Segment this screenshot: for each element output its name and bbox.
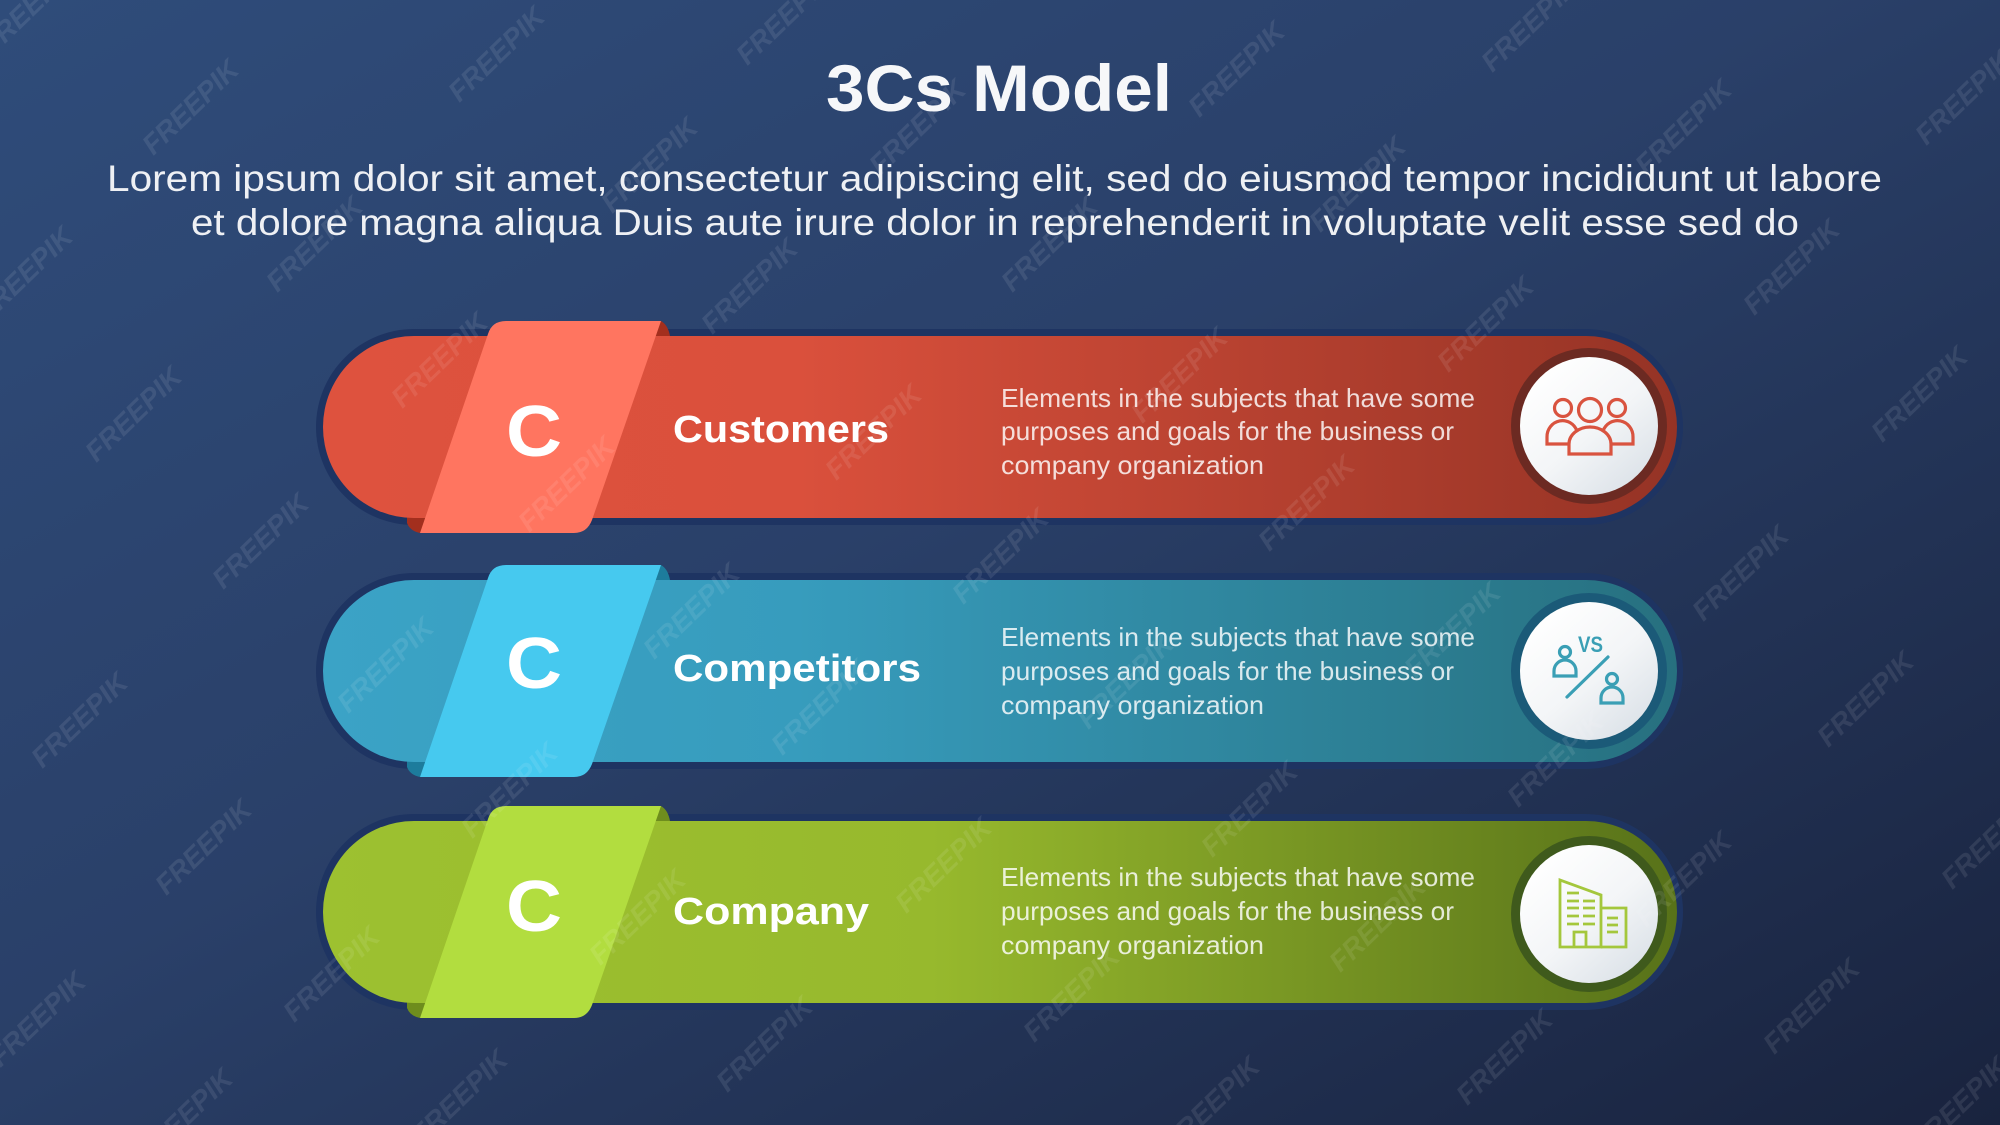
icon disc: [1511, 348, 1667, 504]
watermarks: FREEPIK: [1017, 940, 1127, 1047]
description: [1001, 383, 1475, 480]
watermarks: FREEPIK: [25, 666, 135, 773]
watermarks: FREEPIK: [1303, 130, 1413, 237]
icon disc: [1511, 593, 1667, 749]
ribbon: [420, 321, 661, 533]
watermarks: FREEPIK: [1501, 705, 1611, 812]
watermarks: FREEPIK: [79, 360, 189, 467]
description: purposes and goals for the business or: [1001, 896, 1454, 926]
icon: office building: [1560, 880, 1626, 947]
description: company organization: [1001, 690, 1264, 720]
bar outline: [316, 814, 1683, 1010]
icon: group of people: [1547, 398, 1633, 454]
bar outline: [316, 573, 1683, 769]
bar: [323, 821, 1677, 1003]
watermarks: FREEPIK: [1252, 449, 1362, 556]
letter C: C: [506, 624, 562, 704]
watermarks: FREEPIK: [1195, 755, 1305, 862]
description: [1001, 862, 1475, 960]
watermarks: FREEPIK: [995, 190, 1105, 297]
watermarks: FREEPIK: [512, 430, 622, 537]
ribbon: [420, 565, 661, 777]
bar: [323, 336, 1677, 518]
watermarks: FREEPIK: [1686, 519, 1796, 626]
watermarks: FREEPIK: [1450, 1003, 1560, 1110]
heading: Customers: [673, 409, 889, 451]
panel: customers: [316, 321, 1683, 533]
ribbon fold shadows: [407, 565, 670, 777]
ribbon: [420, 806, 661, 1018]
watermarks: FREEPIK: [206, 487, 316, 594]
bar outline: [316, 329, 1683, 525]
watermarks: FREEPIK: [1629, 825, 1739, 932]
watermarks: FREEPIK: [1629, 73, 1739, 180]
watermarks: FREEPIK: [260, 190, 370, 297]
description: Elements in the subjects that have some: [1001, 622, 1475, 652]
ribbon fold shadows: [407, 806, 670, 1018]
ribbon fold shadows: [407, 321, 670, 533]
watermarks: FREEPIK: [1398, 576, 1508, 683]
description: company organization: [1001, 450, 1264, 480]
watermarks: FREEPIK: [583, 863, 693, 970]
description: purposes and goals for the business or: [1001, 656, 1454, 686]
description: Elements in the subjects that have some: [1001, 862, 1475, 892]
watermarks: FREEPIK: [1757, 952, 1867, 1059]
watermarks: FREEPIK: [863, 73, 973, 180]
intro paragraph: Lorem ipsum dolor sit amet, consectetur adipiscing elit, sed do eiusmod tempor incididunt ut labore: [107, 158, 1882, 199]
watermarks: FREEPIK: [331, 611, 441, 718]
watermarks: FREEPIK: [946, 502, 1056, 609]
watermarks: FREEPIK: [277, 920, 387, 1027]
bar: [323, 580, 1677, 762]
watermarks: FREEPIK: [1811, 645, 1921, 752]
watermarks: FREEPIK: [1431, 270, 1541, 377]
watermarks: FREEPIK: [1182, 15, 1292, 122]
description: purposes and goals for the business or: [1001, 416, 1454, 446]
icon: versus: VS: [1578, 632, 1603, 657]
watermarks: FREEPIK: [1865, 340, 1975, 447]
watermarks: FREEPIK: [1071, 627, 1181, 734]
watermarks: FREEPIK: [442, 0, 552, 107]
letter C: C: [506, 867, 562, 947]
description: [1001, 622, 1475, 720]
intro paragraph: et dolore magna aliqua Duis aute irure dolor in reprehenderit in voluptate velit esse sed do: [191, 202, 1799, 243]
watermarks: FREEPIK: [136, 53, 246, 160]
watermarks: FREEPIK: [819, 378, 929, 485]
panel: company: [316, 806, 1683, 1018]
heading: Competitors: [673, 648, 921, 690]
icon: versus: [1554, 632, 1623, 703]
watermarks: FREEPIK: [149, 793, 259, 900]
watermarks: FREEPIK: [1737, 213, 1847, 320]
watermarks: FREEPIK: [637, 557, 747, 664]
intro paragraph: [107, 158, 1882, 243]
watermarks: FREEPIK: [455, 736, 565, 843]
title: 3Cs Model: [826, 51, 1172, 125]
letter C: C: [506, 392, 562, 472]
watermarks: FREEPIK: [695, 232, 805, 339]
watermarks: FREEPIK: [595, 111, 705, 218]
watermarks: FREEPIK: [1323, 870, 1433, 977]
description: Elements in the subjects that have some: [1001, 383, 1475, 413]
description: company organization: [1001, 930, 1264, 960]
watermarks: FREEPIK: [889, 811, 999, 918]
watermarks: FREEPIK: [1125, 321, 1235, 428]
panel: competitors: [316, 565, 1683, 777]
watermarks: FREEPIK: [765, 653, 875, 760]
icon disc: [1511, 836, 1667, 992]
watermarks: FREEPIK: [710, 990, 820, 1097]
watermarks: FREEPIK: [385, 306, 495, 413]
heading: Company: [673, 891, 869, 933]
